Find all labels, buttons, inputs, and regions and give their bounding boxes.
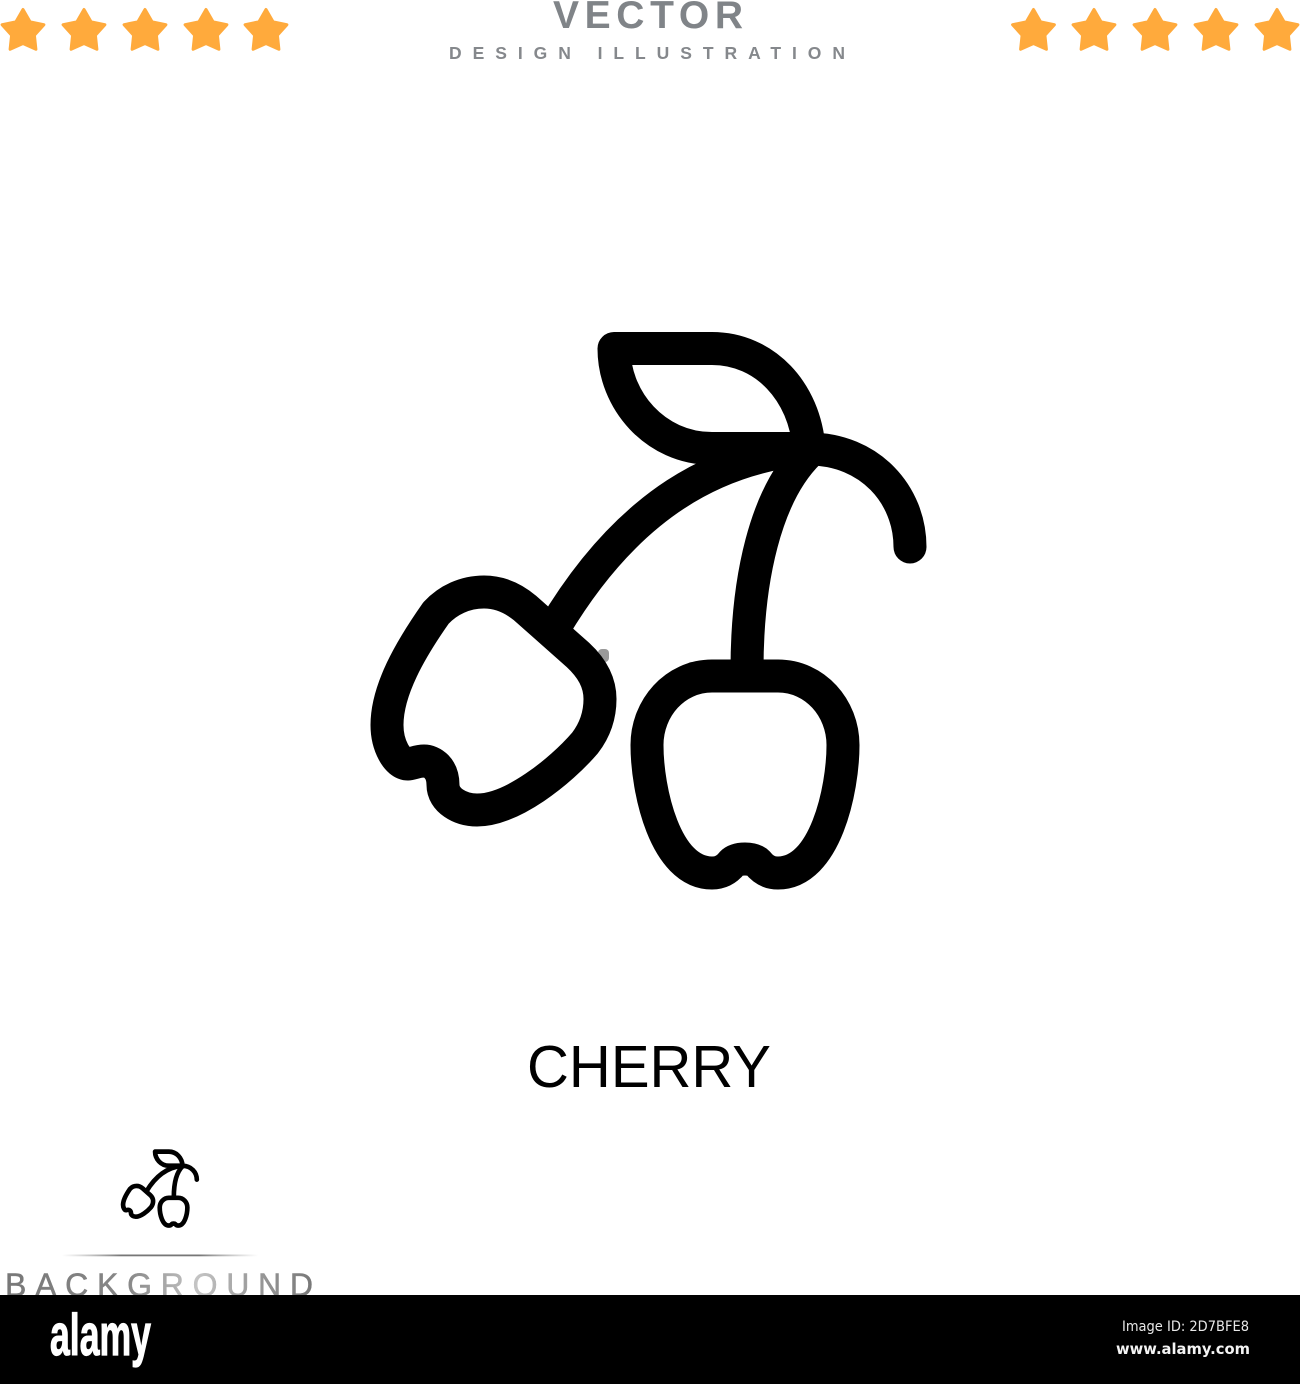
logo: alamy: alamy — [50, 1303, 151, 1368]
right stem — [747, 452, 809, 670]
leaf — [614, 348, 809, 448]
left cherry — [387, 592, 600, 810]
right star rating — [1013, 10, 1298, 49]
right cherry — [647, 676, 843, 873]
website: www.alamy.com — [1116, 1340, 1250, 1358]
right curved twig — [809, 449, 910, 547]
footer bar — [0, 1295, 1300, 1384]
subheading: design illustration: DESIGN ILLUSTRATION — [449, 43, 845, 63]
left star rating — [2, 10, 287, 49]
icon: large cherry — [387, 348, 910, 873]
left stem — [553, 449, 805, 630]
icon: small cherry — [123, 1152, 197, 1226]
label: background: BACKGROUND — [5, 1267, 313, 1303]
image id: Image ID: 2D7BFE8 — [1122, 1319, 1249, 1335]
title: cherry: CHERRY — [527, 1034, 771, 1100]
